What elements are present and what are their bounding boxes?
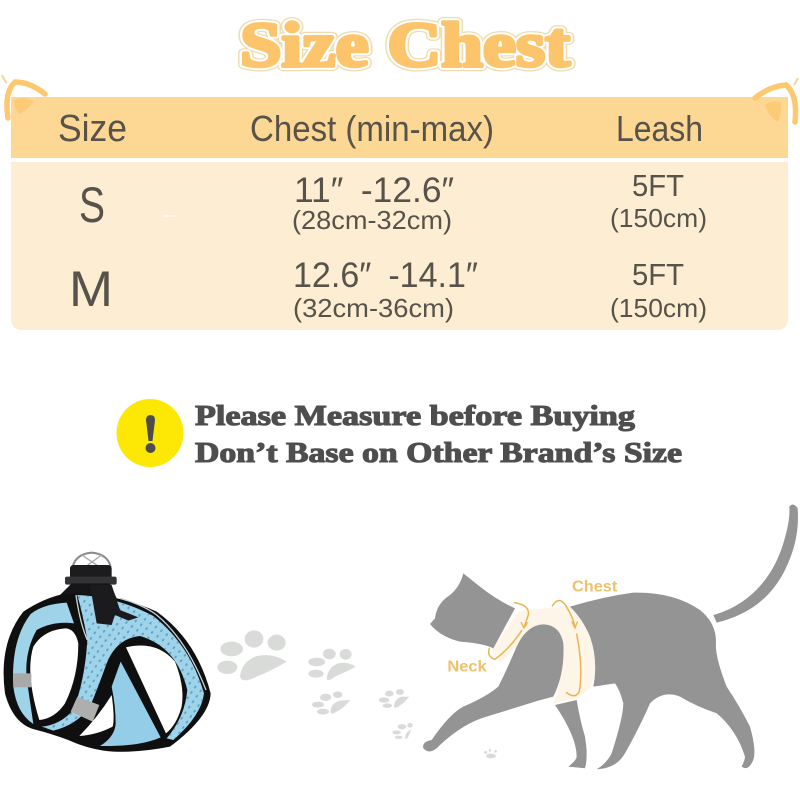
notice text: Don’t Base on Other Brand’s Size	[195, 438, 682, 469]
harness lower opening	[79, 695, 114, 736]
panel: size table	[2, 75, 798, 330]
harness reflective tab right	[71, 697, 99, 722]
cat tail	[713, 505, 798, 623]
harness main mesh band	[42, 595, 204, 740]
chest cm M: (32cm-36cm)	[293, 293, 454, 323]
paw 6	[484, 749, 497, 758]
paw 3	[312, 691, 350, 715]
cat body	[570, 593, 754, 769]
notice text	[195, 401, 682, 469]
chest cm S: (28cm-32cm)	[292, 205, 452, 235]
harness	[4, 553, 211, 752]
leash cm S: (150cm)	[610, 203, 707, 233]
harness black trim	[4, 594, 211, 752]
leash cm M: (150cm)	[610, 293, 707, 323]
harness reflective trim	[76, 595, 206, 690]
harness reflective tab left	[13, 673, 31, 687]
title: Size Chest	[240, 9, 571, 80]
harness center strap	[90, 585, 138, 625]
cat head	[430, 573, 515, 648]
cat harness area	[492, 607, 597, 703]
header: size: Size	[58, 108, 127, 150]
arrow: neck measure	[489, 603, 528, 659]
cat front leg	[423, 624, 564, 751]
label: neck: Neck	[447, 659, 487, 676]
header: leash: Leash	[616, 108, 703, 149]
paw 5	[392, 723, 413, 739]
icon: right cat ear	[755, 78, 798, 122]
leash S: 5FT	[632, 168, 684, 203]
harness gusset	[100, 662, 161, 746]
title: Size Chest	[240, 9, 571, 80]
icon: warning	[116, 399, 184, 467]
paw prints	[217, 630, 497, 758]
label: chest: Chest	[572, 579, 617, 596]
size S: S	[79, 177, 105, 233]
size M: M	[69, 261, 113, 317]
harness right opening	[126, 645, 182, 733]
paw 2	[308, 649, 356, 680]
harness buckle	[60, 553, 117, 598]
leash M: 5FT	[632, 257, 684, 292]
mark	[163, 215, 176, 217]
chest inches S: 11″ -12.6″	[294, 171, 454, 210]
harness left band	[13, 603, 74, 724]
title: Size Chest	[240, 9, 571, 80]
cat illustration	[423, 505, 798, 769]
paw 1	[217, 630, 287, 680]
table body	[11, 162, 788, 330]
table header band	[11, 97, 788, 158]
paw 4	[379, 689, 409, 708]
chest inches M: 12.6″ -14.1″	[293, 256, 478, 295]
row S	[79, 168, 707, 235]
notice text: Please Measure before Buying	[195, 401, 635, 432]
cat silhouette	[423, 505, 798, 769]
header: chest: Chest (min-max)	[250, 108, 494, 149]
arrow: chest measure	[552, 601, 581, 696]
row M	[69, 256, 707, 323]
icon: left cat ear	[2, 75, 45, 118]
cat far leg	[555, 700, 587, 768]
harness left opening	[30, 628, 78, 720]
